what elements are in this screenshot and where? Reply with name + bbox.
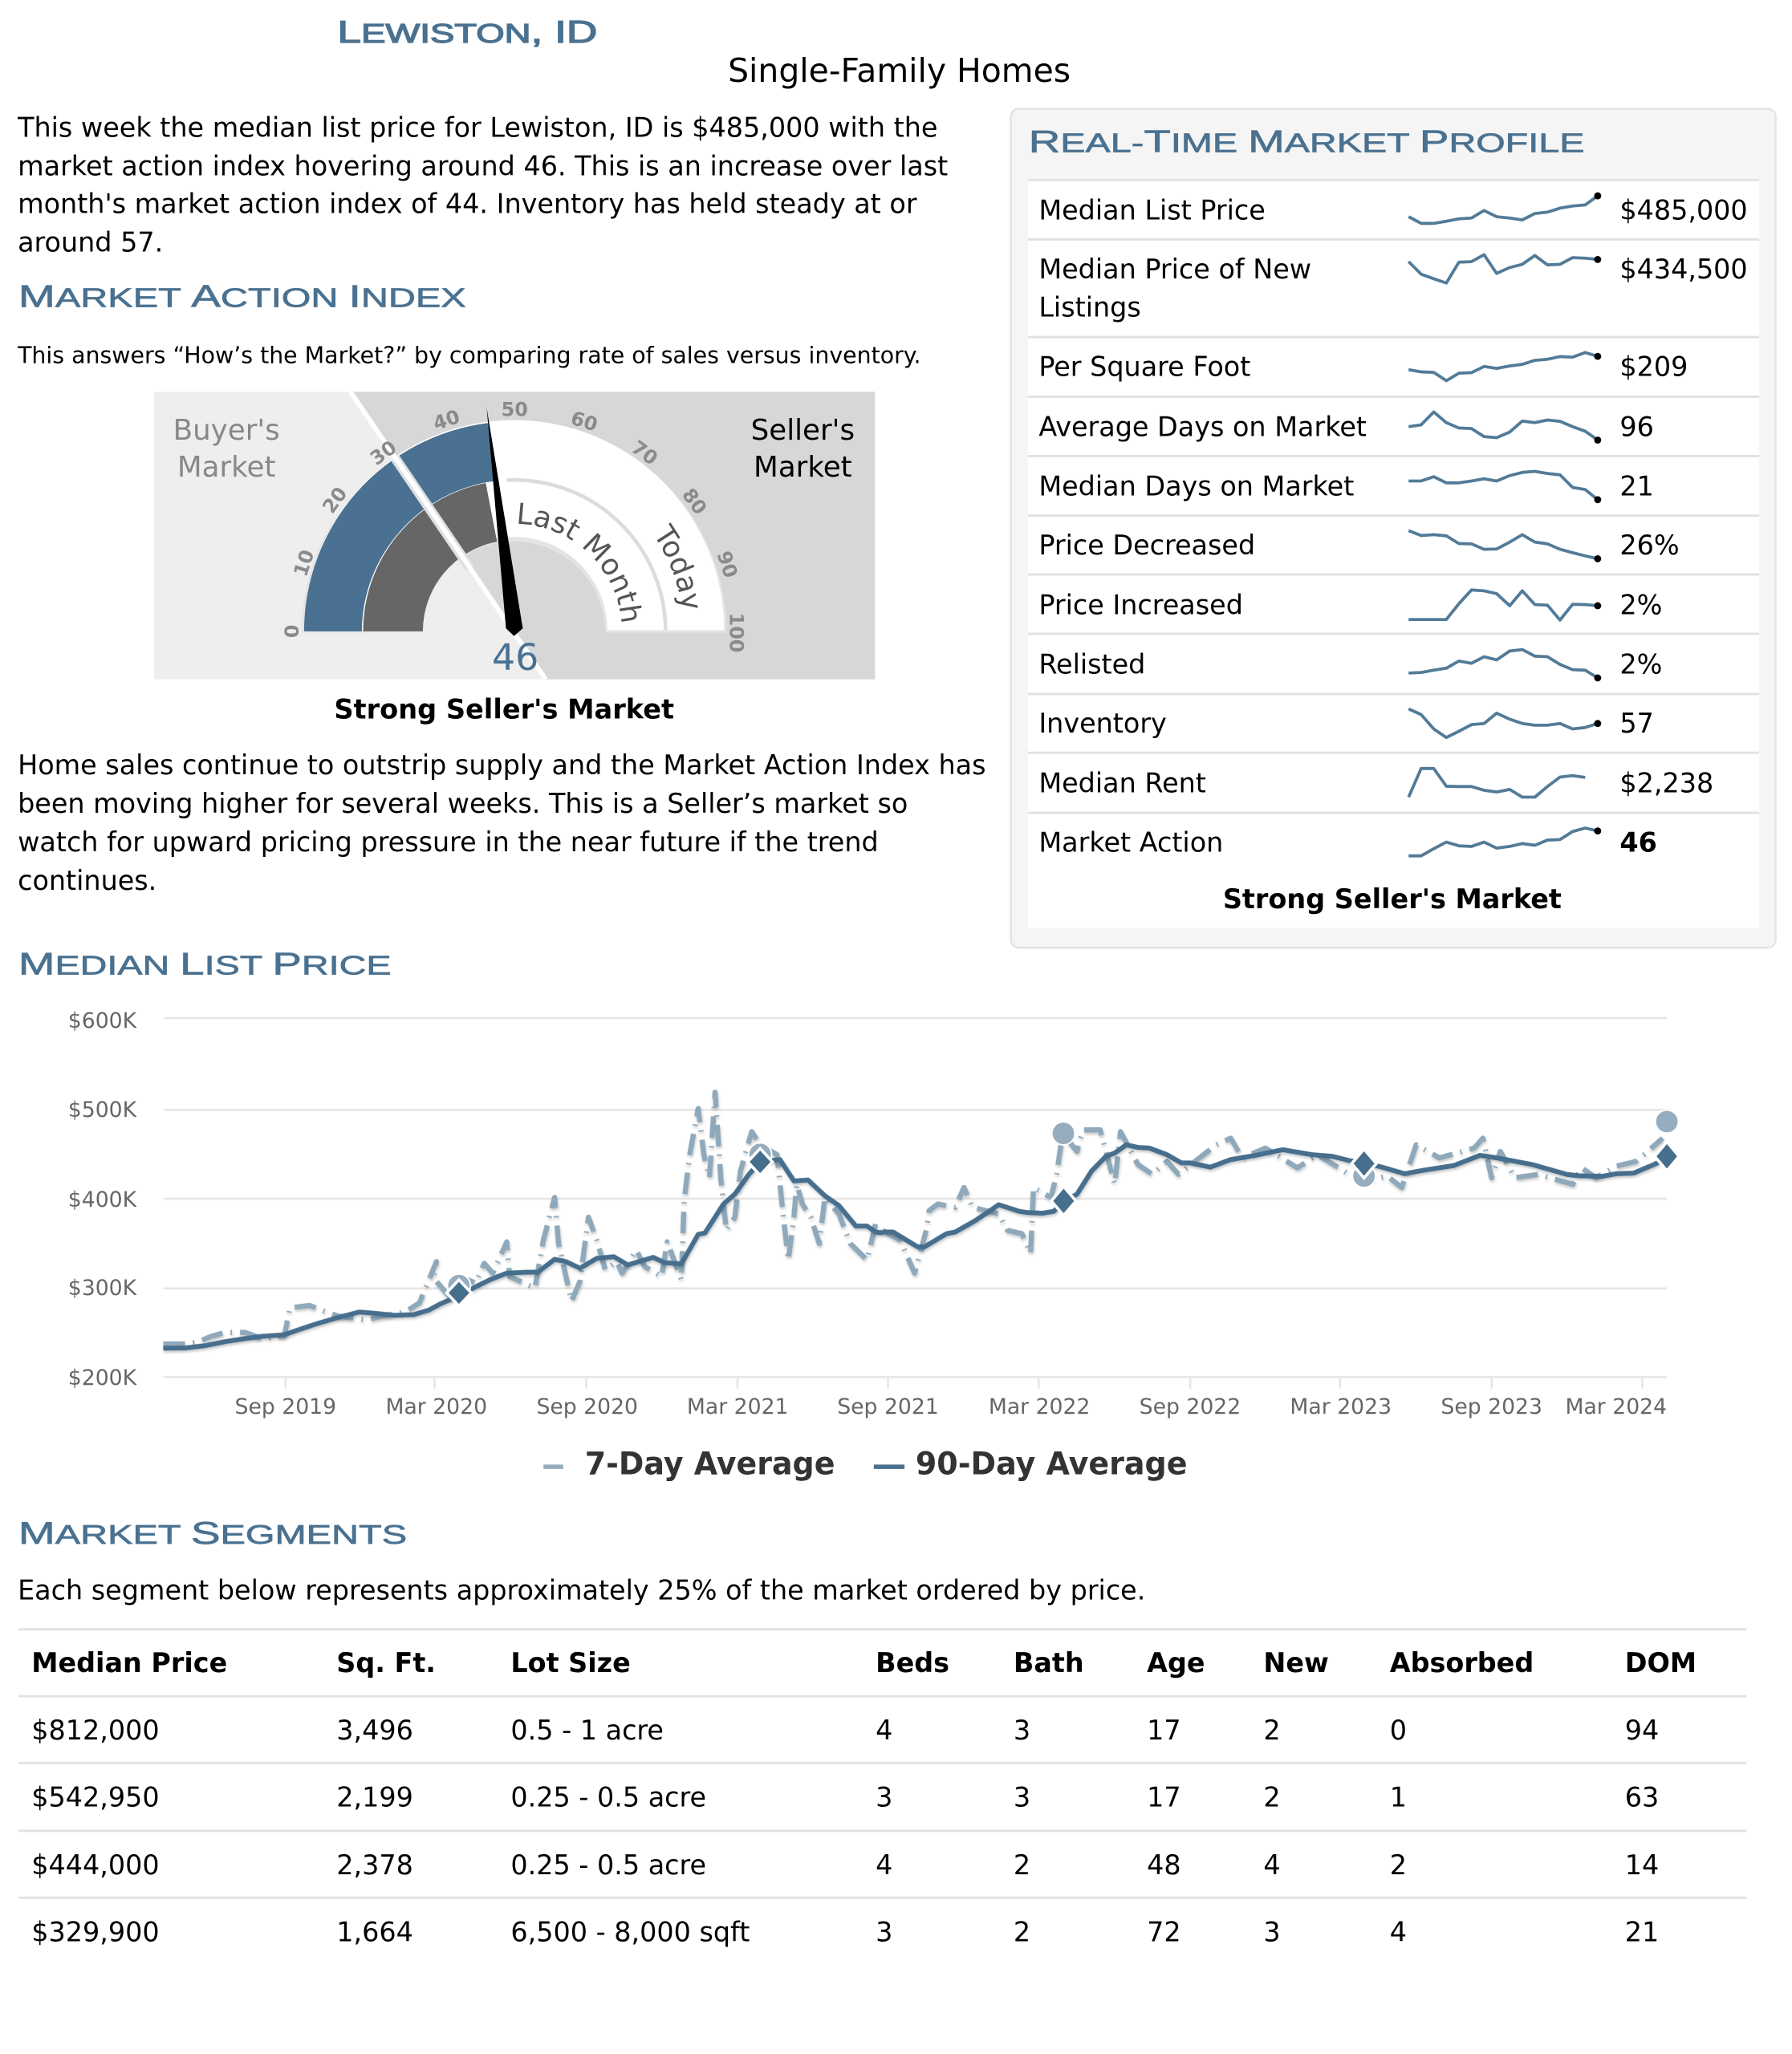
table row 3: 48 [1147, 1849, 1181, 1881]
row: average days on market: Average Days on Market [1038, 411, 1367, 442]
x axis labels: Sep 2021 [837, 1394, 939, 1419]
x axis labels: Mar 2020 [385, 1394, 487, 1419]
row: per square foot: $209 [1619, 351, 1688, 383]
table header: Age [1147, 1647, 1205, 1679]
market action paragraph: continues. [18, 865, 156, 896]
table row 2: 2 [1263, 1781, 1281, 1812]
buyer's market label: Buyer's [173, 414, 280, 447]
table row 2: 0.25 - 0.5 acre [510, 1781, 706, 1812]
table row 2: 3 [1014, 1781, 1030, 1812]
gauge scale labels: 60 [568, 407, 600, 436]
seller's market label: Seller's [751, 414, 855, 447]
row: median days on market: 21 [1619, 471, 1654, 502]
row: inventory [1038, 708, 1654, 739]
x axis labels: Sep 2020 [536, 1394, 638, 1419]
chart gridlines [164, 1018, 1667, 1389]
gauge scale labels [281, 399, 748, 652]
row: median list price: $485,000 [1619, 194, 1748, 225]
row: average days on market: 96 [1619, 411, 1654, 442]
table row 4: $329,900 [31, 1916, 160, 1947]
gauge caption: Strong Seller's Market [334, 694, 674, 725]
row: median list price [1038, 193, 1748, 225]
row: average days on market [1038, 411, 1654, 444]
panel: real-time market profile [1011, 109, 1776, 948]
market segments description: Each segment below represents approximately 25% of the market ordered by price. [18, 1574, 1145, 1605]
table header: New [1263, 1647, 1329, 1679]
row: price increased: 2% [1619, 589, 1662, 620]
x axis labels: Mar 2024 [1565, 1394, 1667, 1419]
y axis labels: $600K [68, 1009, 138, 1033]
table header: Absorbed [1390, 1647, 1534, 1679]
row: per square foot: Per Square Foot [1038, 351, 1250, 383]
row: median rent: Median Rent [1038, 767, 1206, 798]
row: relisted: 2% [1619, 649, 1662, 680]
table row 2: 2,199 [336, 1781, 413, 1812]
market action description: This answers “How’s the Market?” by comparing rate of sales versus inventory. [17, 341, 921, 368]
market action paragraph [18, 749, 986, 896]
table header: Beds [876, 1647, 949, 1679]
row: market action [1038, 826, 1657, 858]
table header: Bath [1014, 1647, 1084, 1679]
x axis labels [235, 1394, 1667, 1419]
table row 4: 6,500 - 8,000 sqft [510, 1916, 750, 1947]
table row 1: 94 [1625, 1715, 1659, 1746]
gauge scale labels: 100 [725, 613, 748, 652]
gauge scale labels: 10 [289, 547, 319, 579]
gauge background: seller's side [351, 392, 875, 680]
today fill arc [304, 423, 495, 631]
needle [486, 408, 522, 636]
heading: median list price: M EDIAN L IST P RICE [18, 947, 392, 982]
y axis labels: $400K [68, 1187, 138, 1212]
gauge value: 46 [492, 635, 538, 679]
row: price decreased: 26% [1619, 530, 1680, 561]
row: inventory: Inventory [1038, 708, 1167, 739]
chart legend [543, 1447, 1188, 1483]
table row 4: 3 [1263, 1916, 1281, 1947]
row: median price of new listings: $434,500 [1619, 254, 1748, 285]
table row 1: 0 [1390, 1715, 1407, 1746]
gauge scale labels: 80 [677, 484, 711, 519]
x axis labels: Mar 2022 [989, 1394, 1090, 1419]
intro paragraph: around 57. [18, 226, 163, 258]
market segments table [18, 1630, 1747, 1947]
90-day average series [163, 1145, 1667, 1348]
last month fill arc [363, 483, 497, 631]
table row 1: 17 [1147, 1715, 1181, 1746]
y axis labels: $200K [68, 1366, 138, 1390]
table row 2 [31, 1781, 1659, 1812]
table row 3: 4 [876, 1849, 892, 1881]
gauge scale labels: 90 [713, 548, 742, 581]
table row 2: 1 [1390, 1781, 1407, 1812]
table row 3 [31, 1849, 1659, 1881]
gauge scale labels: 0 [281, 625, 303, 638]
row: median list price: Median List Price [1038, 194, 1266, 225]
table header [31, 1647, 1697, 1679]
table row 1 [31, 1715, 1659, 1746]
table row 1: 2 [1263, 1715, 1281, 1746]
table row 4: 3 [876, 1916, 892, 1947]
table header: DOM [1625, 1647, 1697, 1679]
x axis labels: Sep 2019 [235, 1394, 336, 1419]
table header: Median Price [31, 1647, 227, 1679]
table row 3: 4 [1263, 1849, 1281, 1881]
table row 1: $812,000 [31, 1715, 160, 1746]
ring divider [506, 480, 665, 630]
intro paragraph: month's market action index of 44. Inventory has held steady at or [18, 189, 917, 220]
table row 3: 2,378 [336, 1849, 413, 1881]
today arc label: Today [656, 522, 698, 608]
row: median days on market [1038, 471, 1654, 503]
table row 4: 1,664 [336, 1916, 413, 1947]
subtitle: Single-Family Homes [728, 51, 1071, 90]
seller's market label: Market [754, 451, 852, 484]
row: market action: 46 [1619, 826, 1657, 858]
table row 3: 2 [1390, 1849, 1407, 1881]
table header: Sq. Ft. [336, 1647, 436, 1679]
table row 1: 0.5 - 1 acre [510, 1715, 664, 1746]
intro paragraph [17, 112, 948, 258]
row: inventory: 57 [1619, 708, 1654, 739]
table row 4 [31, 1916, 1659, 1947]
intro paragraph: This week the median list price for Lewiston, ID is $485,000 with the [17, 112, 937, 144]
buyer seller divider line [351, 392, 546, 680]
row: median rent: $2,238 [1619, 767, 1713, 798]
row: median rent [1038, 767, 1713, 798]
gauge [154, 392, 875, 680]
table row 4: 21 [1625, 1916, 1659, 1947]
x axis labels: Sep 2022 [1140, 1394, 1241, 1419]
x axis labels: Mar 2021 [687, 1394, 789, 1419]
heading: market segments: M ARKET S EGMENTS [18, 1516, 407, 1551]
x axis labels: Mar 2023 [1290, 1394, 1392, 1419]
y axis labels: $300K [68, 1276, 138, 1301]
table row 4: 4 [1390, 1916, 1407, 1947]
table row 2: 3 [876, 1781, 892, 1812]
profile table background [1028, 180, 1759, 928]
table row 3: $444,000 [31, 1849, 160, 1881]
90-day markers [447, 1142, 1679, 1306]
table row 2: $542,950 [31, 1781, 160, 1812]
chart legend: 90-Day Average [916, 1447, 1188, 1483]
last month arc label: Last Month [518, 502, 642, 622]
table row 1: 4 [876, 1715, 892, 1746]
table row 1: 3,496 [336, 1715, 413, 1746]
row: relisted: Relisted [1038, 649, 1145, 680]
market action paragraph: been moving higher for several weeks. This is a Seller’s market so [18, 788, 908, 819]
gauge scale labels: 40 [430, 405, 462, 435]
gauge white ring [304, 420, 724, 630]
panel heading: R EAL- T IME M ARKET P ROFILE [1029, 124, 1585, 159]
row: price increased: Price Increased [1038, 589, 1243, 620]
row: price decreased [1038, 530, 1680, 562]
table row 2: 63 [1625, 1781, 1659, 1812]
panel caption: Strong Seller's Market [1223, 883, 1562, 915]
intro paragraph: market action index hovering around 46. This is an increase over last [18, 150, 948, 181]
chart legend: 7-Day Average [585, 1447, 835, 1483]
row: median price of new listings [1038, 254, 1748, 323]
7-day average series [163, 1092, 1663, 1344]
market action paragraph: Home sales continue to outstrip supply and the Market Action Index has [18, 749, 986, 781]
gauge scale labels: 50 [502, 399, 528, 421]
table row 3: 14 [1625, 1849, 1659, 1881]
row: median price of new listings: Median Price of New [1038, 254, 1311, 285]
gauge scale labels: 20 [318, 483, 351, 518]
7-day markers [448, 1110, 1678, 1297]
market action paragraph: watch for upward pricing pressure in the near future if the trend [18, 826, 879, 858]
row: relisted [1038, 649, 1662, 681]
y axis labels [68, 1009, 138, 1390]
buyer seller divider band [395, 458, 470, 568]
line chart: median list price [68, 1009, 1679, 1483]
gauge scale labels: 30 [366, 436, 400, 470]
gauge scale labels: 70 [627, 436, 662, 470]
row: market action: Market Action [1038, 826, 1223, 858]
row: median price of new listings: Listings [1038, 292, 1141, 323]
x axis labels: Sep 2023 [1441, 1394, 1542, 1419]
gauge background: buyer's side [154, 392, 546, 680]
heading: market action index: M ARKET A CTION INDEX [18, 278, 466, 314]
table header: Lot Size [510, 1647, 631, 1679]
row: price decreased: Price Decreased [1038, 530, 1255, 561]
row: median days on market: Median Days on Market [1038, 471, 1354, 502]
buyer's market label: Market [177, 451, 275, 484]
table row 3: 0.25 - 0.5 acre [510, 1849, 706, 1881]
gauge rim [302, 420, 727, 632]
y axis labels: $500K [68, 1098, 138, 1122]
row: price increased [1038, 589, 1662, 620]
table row 4: 2 [1014, 1916, 1030, 1947]
table row 3: 2 [1014, 1849, 1030, 1881]
table row 4: 72 [1147, 1916, 1181, 1947]
title: L EWISTON , ID [337, 14, 597, 50]
panel background [1011, 109, 1776, 948]
table row 2: 17 [1147, 1781, 1181, 1812]
table row 1: 3 [1014, 1715, 1030, 1746]
row: per square foot [1038, 351, 1688, 383]
